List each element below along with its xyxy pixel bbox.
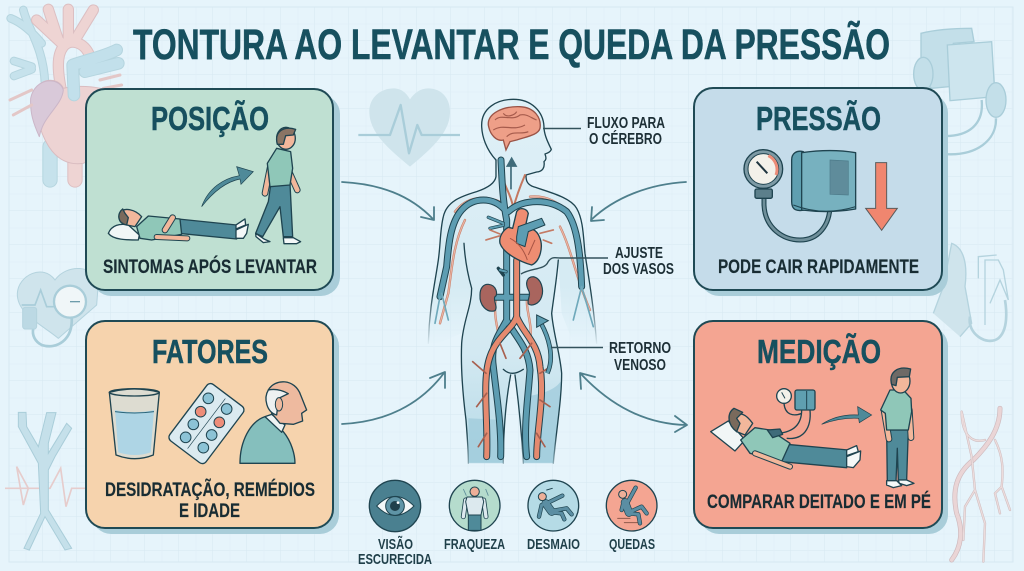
arrow: pressão to body (591, 182, 686, 221)
icon: older man (240, 382, 307, 463)
blue vessels (435, 160, 593, 457)
illustration: lying measurement and standing person (711, 368, 914, 488)
callout: vessel adjustment: AJUSTE (615, 245, 663, 262)
panel: medição (694, 321, 948, 534)
caption: fatores: E IDADE (179, 501, 240, 522)
icon: glass of water (109, 389, 159, 459)
symptom: quedas: QUEDAS (609, 536, 655, 553)
caption: pressão: PODE CAIR RAPIDAMENTE (718, 257, 919, 278)
icon: fainting person (528, 480, 579, 531)
arrow: body to medição (580, 373, 687, 432)
organ: right kidney (527, 277, 543, 305)
symptom: visão escurecida: ESCURECIDA (358, 551, 432, 568)
callout: venous return (551, 340, 671, 374)
organ: brain (488, 107, 540, 150)
body silhouette (428, 99, 597, 463)
symptom: visão escurecida (358, 480, 432, 568)
callout: brain flow (543, 115, 665, 148)
symptom: desmaio: DESMAIO (527, 536, 580, 553)
caption: posição: SINTOMAS APÓS LEVANTAR (103, 256, 317, 278)
heading: posição: POSIÇÃO (151, 100, 269, 137)
icon: blister pack of pills (167, 382, 246, 465)
callout: venous return: VENOSO (614, 357, 666, 374)
background: ghost heart top left (10, 9, 122, 180)
symptom: fraqueza (444, 480, 505, 553)
icon: blood pressure cuff (744, 150, 856, 240)
arrow: venous return (541, 323, 551, 373)
icon: falling person (606, 480, 657, 531)
symptom: visão escurecida: VISÃO (378, 535, 413, 553)
illustration: person lying then walking (108, 127, 301, 244)
heading: fatores: FATORES (152, 333, 268, 370)
arrow: posição to body (342, 182, 434, 220)
symptom: quedas (606, 480, 657, 553)
icon: eye (369, 480, 421, 532)
heading: medição: MEDIÇÃO (757, 333, 881, 370)
caption: fatores: DESIDRATAÇÃO, REMÉDIOS (105, 479, 315, 501)
background: ghost veins lower right (952, 408, 1010, 562)
background: ghost heart with pulse (358, 88, 460, 167)
panel: fatores (86, 321, 339, 534)
organ: left kidney (480, 284, 497, 311)
organ: heart (500, 209, 541, 265)
panel: pressão (694, 88, 948, 296)
arrow: fatores to body (342, 372, 445, 424)
caption: fatores (105, 479, 315, 522)
callout: vessel adjustment: DOS VASOS (603, 261, 674, 278)
background: ghost cuff top right (914, 28, 1006, 154)
callout: brain flow: FLUXO PARA (587, 115, 665, 132)
symptom: fraqueza: FRAQUEZA (444, 536, 505, 553)
panel: posição (86, 89, 340, 296)
background: ghost arm and cuff right (933, 243, 1008, 341)
body diagram (428, 99, 597, 463)
symptom: desmaio (527, 480, 580, 553)
callout: brain flow: O CÉREBRO (589, 129, 662, 148)
callout: venous return: RETORNO (609, 340, 671, 357)
background: ghost pressure heart left (17, 268, 98, 346)
caption: medição: COMPARAR DEITADO E EM PÉ (707, 491, 931, 513)
callout: vessel adjustment (521, 245, 674, 278)
red vessels (440, 175, 590, 343)
heading: pressão: PRESSÃO (756, 100, 881, 137)
background: ghost vessel lower left (5, 412, 87, 550)
arrow: pressure falling (866, 163, 897, 230)
icon: weak person (449, 480, 500, 531)
arteries (473, 230, 553, 457)
arrow: flow to brain (507, 158, 516, 189)
